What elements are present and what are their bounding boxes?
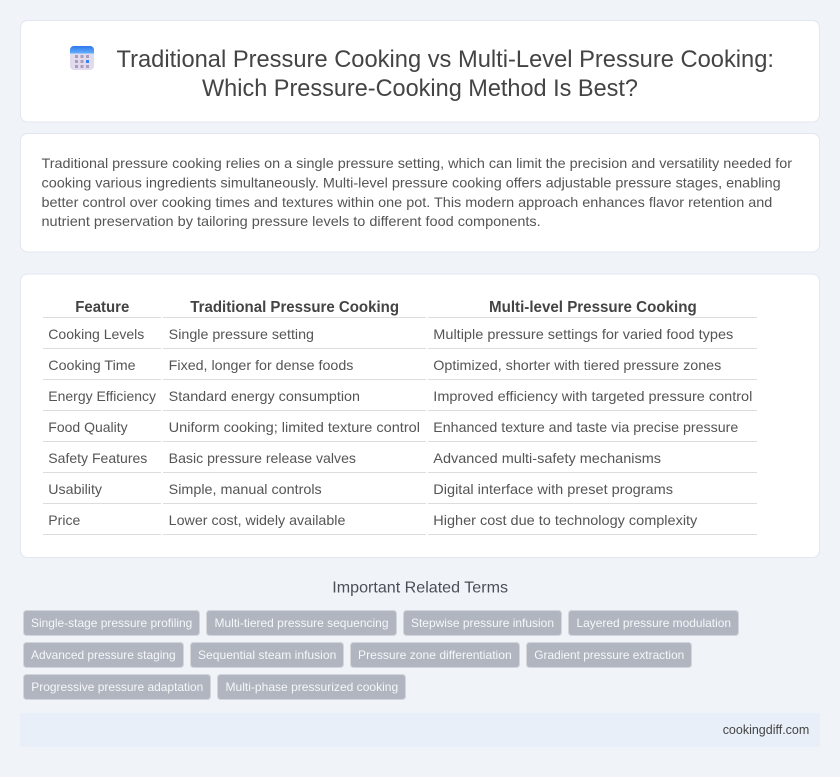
row: price: Higher cost due to technology complexity	[433, 512, 697, 528]
panel: related term tags	[24, 610, 738, 700]
panel: header	[20, 20, 820, 122]
title: Which Pressure-Cooking Method Is Best?	[202, 75, 638, 102]
row: safety features: Basic pressure release valves	[169, 450, 356, 466]
tag: Single-stage pressure profiling	[31, 616, 192, 630]
tag	[526, 642, 692, 668]
footer bar	[20, 713, 820, 747]
row: food quality: Enhanced texture and taste via precise pressure	[433, 419, 739, 435]
intro text block	[42, 155, 792, 229]
panel: comparison table	[20, 274, 820, 558]
row: cooking time: Fixed, longer for dense foods	[169, 357, 353, 373]
intro text block: Traditional pressure cooking relies on a single pressure setting, which can limit the precision and versatility needed for	[42, 155, 792, 171]
row: energy efficiency: Improved efficiency with targeted pressure control	[433, 388, 752, 404]
tag: Multi-tiered pressure sequencing	[214, 616, 388, 630]
row: safety features: Advanced multi-safety mechanisms	[433, 450, 661, 466]
tag	[24, 642, 184, 668]
tag: Progressive pressure adaptation	[31, 680, 203, 694]
row: cooking levels: Cooking Levels	[48, 326, 144, 342]
row: cooking time: Cooking Time	[48, 357, 136, 373]
footer source: cookingdiff.com	[723, 722, 809, 737]
tag	[24, 610, 200, 636]
row: cooking levels: Multiple pressure settings for varied food types	[433, 326, 733, 342]
row: price: Lower cost, widely available	[169, 512, 346, 528]
intro text block: nutrient preservation by tailoring pressure levels to different food components.	[42, 213, 541, 229]
heading: important related terms: Important Related Terms	[332, 580, 508, 596]
tag: Stepwise pressure infusion	[411, 616, 554, 630]
table header row	[43, 299, 757, 318]
row: energy efficiency: Energy Efficiency	[48, 388, 156, 404]
table header row: Multi-level Pressure Cooking	[489, 299, 697, 316]
tag	[190, 642, 344, 668]
intro text block: better control over cooking times and textures within one pot. This modern approach enhances flavor retention and	[42, 194, 772, 210]
title	[116, 46, 774, 102]
row: cooking levels: Single pressure setting	[169, 326, 314, 342]
icon: calendar grid	[70, 46, 94, 70]
tag: Gradient pressure extraction	[534, 648, 684, 662]
row: cooking levels	[43, 326, 757, 349]
tag: Layered pressure modulation	[576, 616, 731, 630]
tag	[404, 610, 562, 636]
tag	[568, 610, 738, 636]
tag	[24, 674, 210, 700]
intro text block: cooking various ingredients simultaneously. Multi-level pressure cooking offers adjustable pressure stages, enabling	[42, 174, 781, 190]
row: safety features	[43, 450, 757, 473]
panel: introduction	[20, 134, 820, 252]
row: price	[43, 512, 757, 535]
row: energy efficiency: Standard energy consumption	[169, 388, 360, 404]
row: usability: Usability	[48, 481, 102, 497]
tag: Sequential steam infusion	[198, 648, 336, 662]
row: usability: Digital interface with preset programs	[433, 481, 673, 497]
row: food quality	[43, 419, 757, 442]
row: usability: Simple, manual controls	[169, 481, 322, 497]
tag: Multi-phase pressurized cooking	[226, 680, 398, 694]
row: food quality: Food Quality	[48, 419, 128, 435]
tag: Pressure zone differentiation	[358, 648, 512, 662]
row: usability	[43, 481, 757, 504]
tag	[206, 610, 396, 636]
row: energy efficiency	[43, 388, 757, 411]
tag: Advanced pressure staging	[31, 648, 176, 662]
row: cooking time	[43, 357, 757, 380]
tag	[350, 642, 520, 668]
tag	[218, 674, 406, 700]
row: food quality: Uniform cooking; limited texture control	[169, 419, 420, 435]
row: price: Price	[48, 512, 81, 528]
table header row: Traditional Pressure Cooking	[190, 299, 399, 316]
row: cooking time: Optimized, shorter with tiered pressure zones	[433, 357, 721, 373]
table header row: Feature	[75, 299, 129, 316]
row: safety features: Safety Features	[48, 450, 147, 466]
title: Traditional Pressure Cooking vs Multi-Level Pressure Cooking:	[116, 46, 774, 73]
